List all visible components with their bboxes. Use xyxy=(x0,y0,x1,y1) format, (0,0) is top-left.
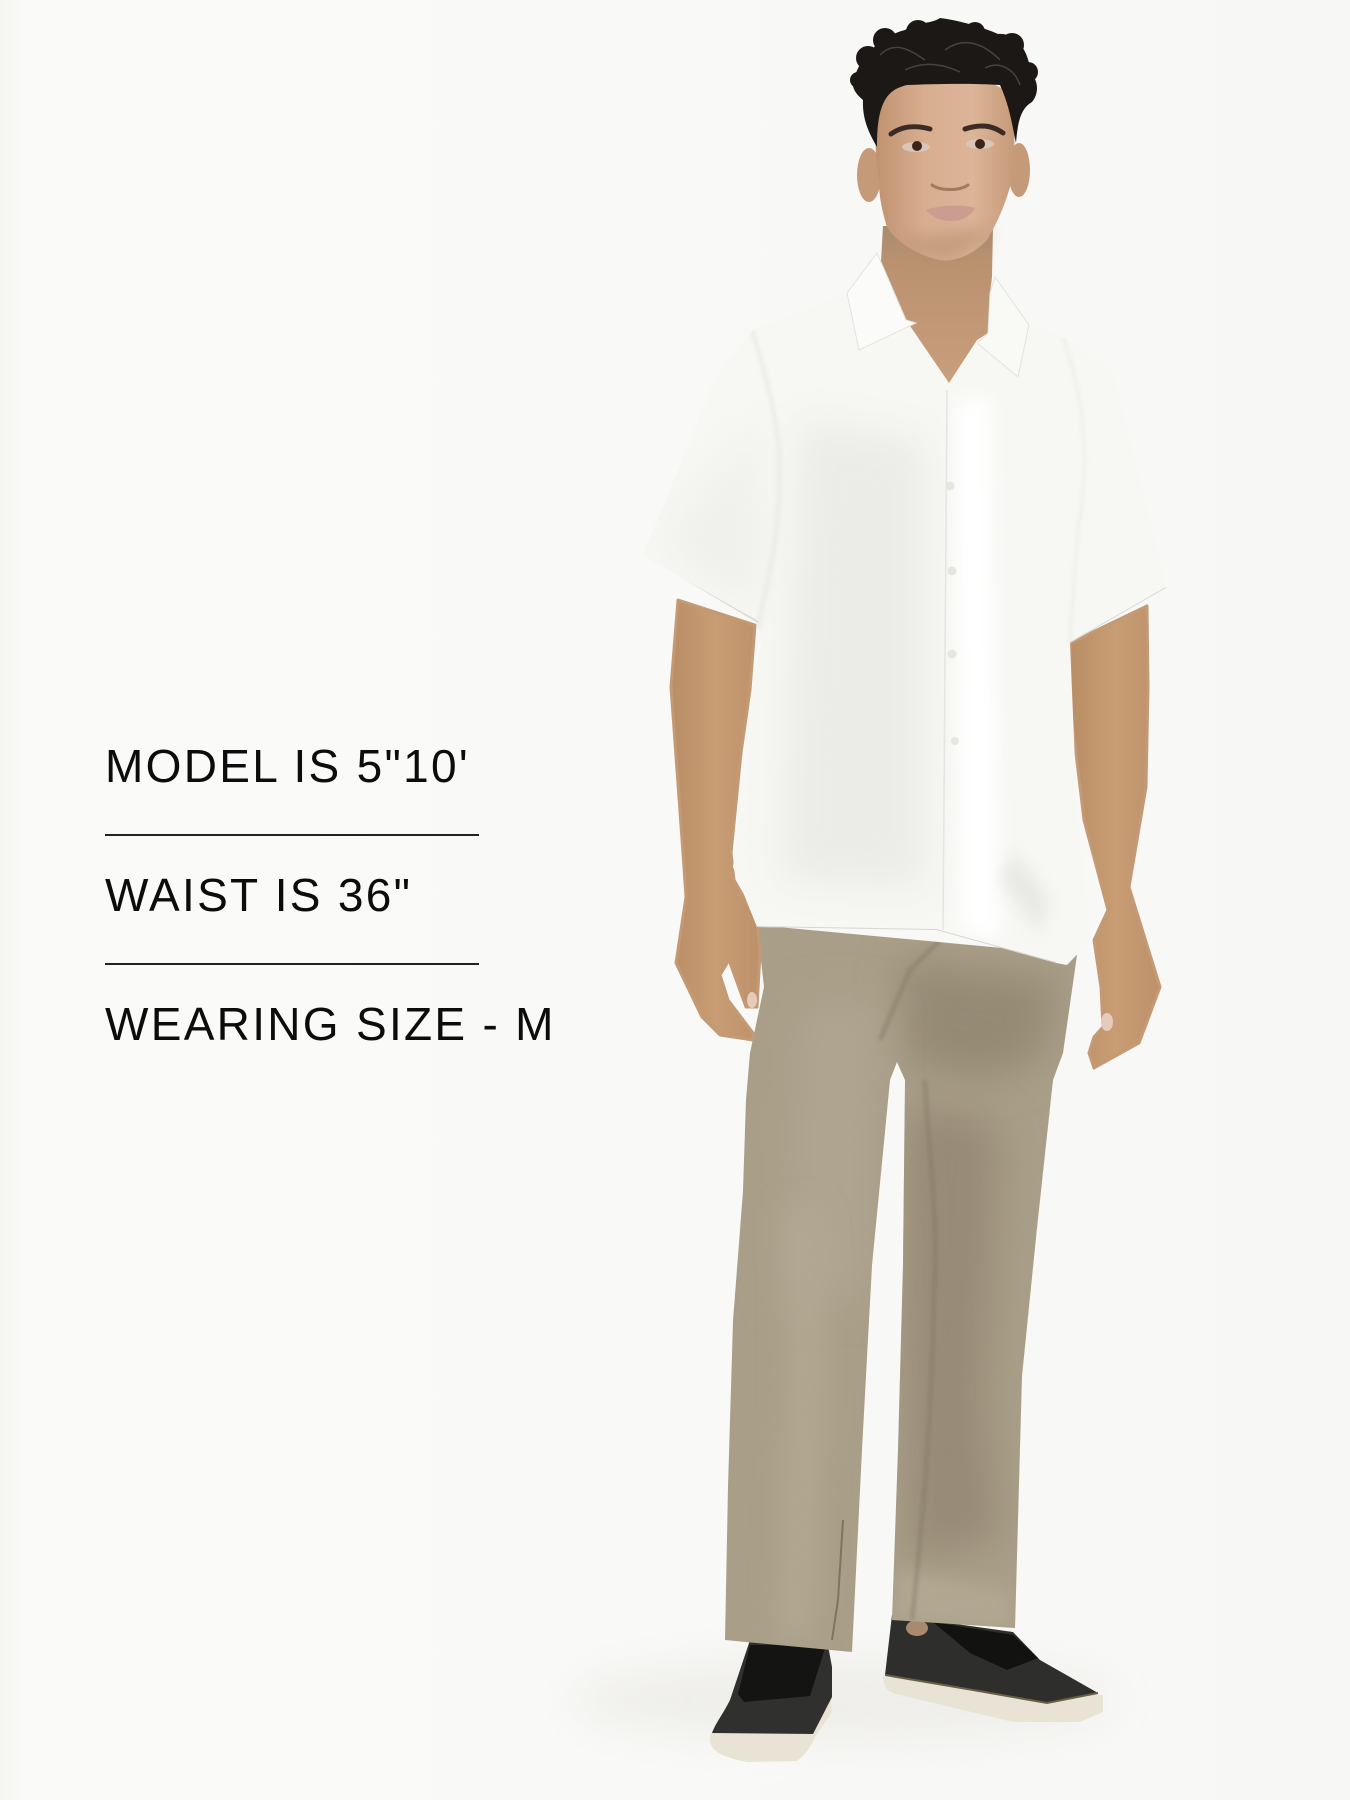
left shoe xyxy=(710,1640,832,1762)
photo of standing model xyxy=(616,18,1166,1762)
collar xyxy=(847,253,1029,377)
neck xyxy=(881,226,993,383)
shirt shading xyxy=(644,330,1166,963)
divider xyxy=(105,834,479,836)
ears xyxy=(857,143,1030,202)
right arm and hand xyxy=(1070,606,1160,1068)
face xyxy=(876,76,1014,260)
left thumb nail xyxy=(747,992,757,1008)
mouth xyxy=(926,206,975,221)
shirt buttons xyxy=(946,482,959,745)
floor shadow xyxy=(570,1658,1110,1742)
eyebrows xyxy=(891,126,1003,134)
nose xyxy=(932,185,968,190)
right shoe xyxy=(883,1615,1103,1722)
left arm and hand xyxy=(671,600,760,1040)
shoes xyxy=(710,1615,1103,1762)
chin shadow xyxy=(895,229,990,260)
eyes xyxy=(902,139,994,152)
size details text block xyxy=(105,740,556,1050)
right thumb nail xyxy=(1101,1013,1113,1031)
hair curls xyxy=(880,43,1020,85)
text: model height: MODEL IS 5"10' xyxy=(105,740,470,792)
divider xyxy=(105,963,479,965)
text: size worn: WEARING SIZE - M xyxy=(105,998,556,1050)
trouser shading xyxy=(780,940,1060,1640)
text: waist size: WAIST IS 36" xyxy=(105,869,412,921)
head and neck xyxy=(847,18,1038,383)
trousers xyxy=(725,925,1077,1652)
hair xyxy=(850,18,1038,147)
white shirt xyxy=(680,330,1166,965)
